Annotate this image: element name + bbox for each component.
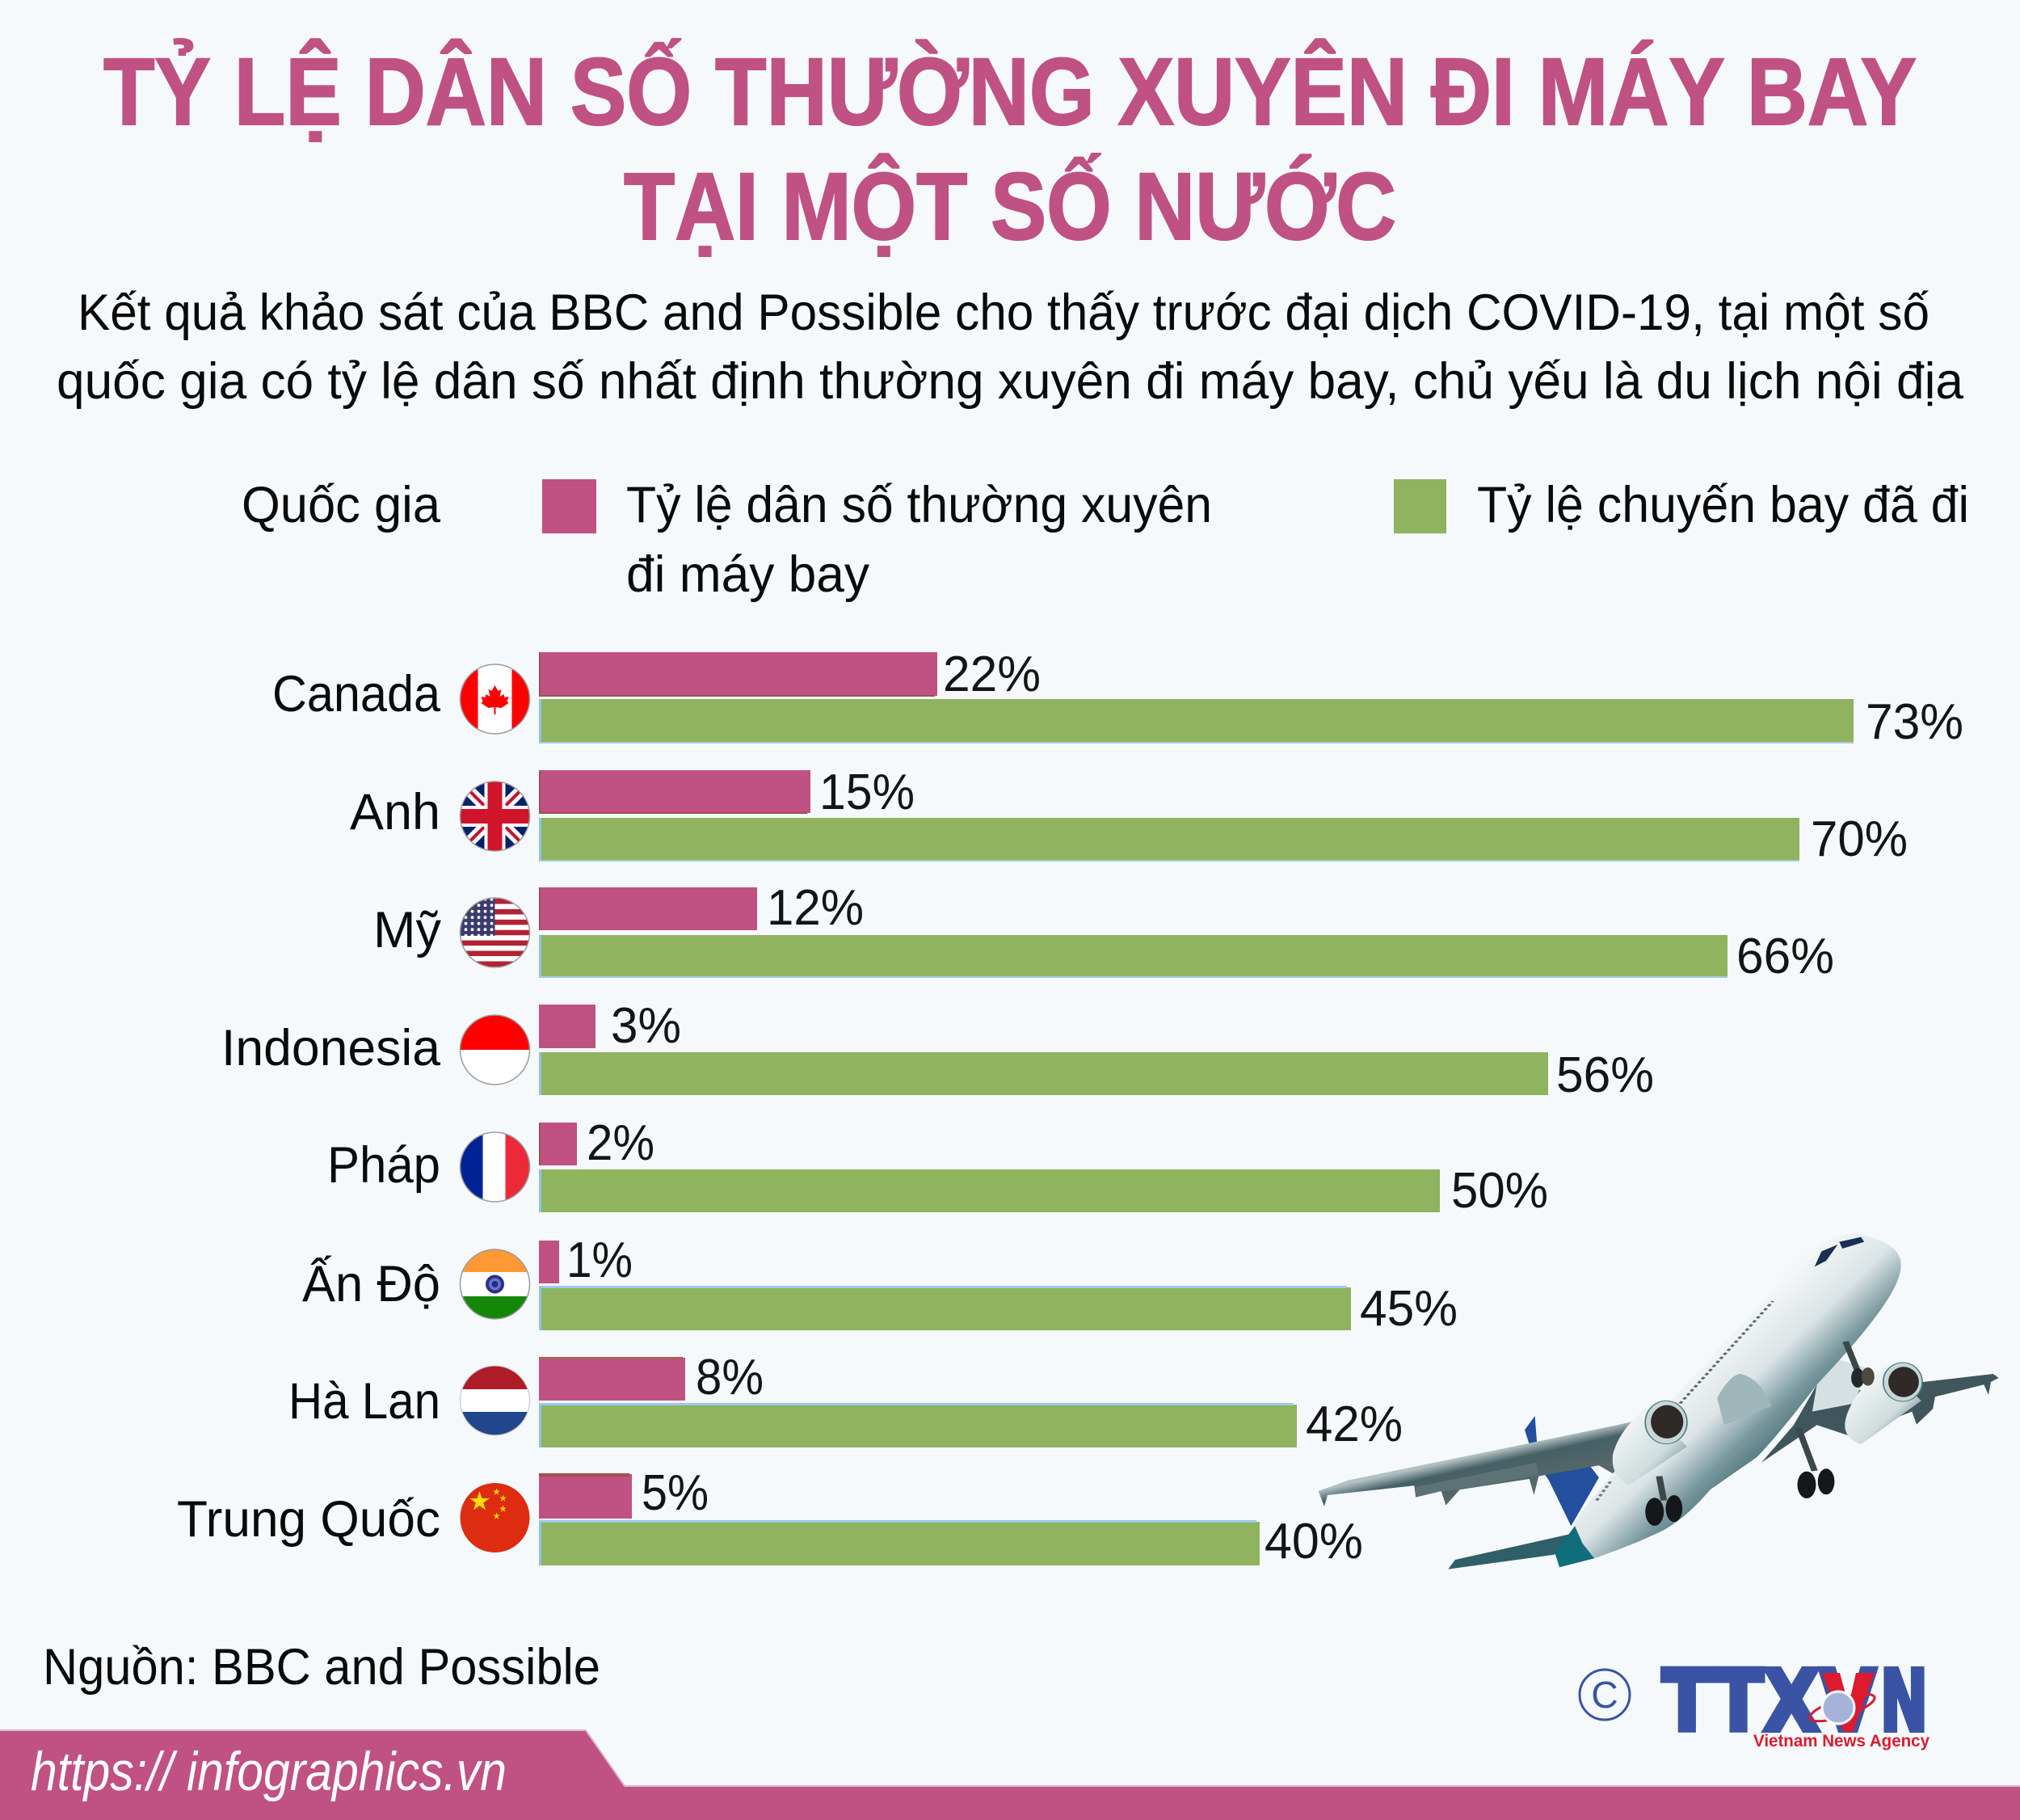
footer band: https:// infographics.vn [31,1741,507,1802]
legend: Tỷ lệ chuyến bay đã đi [1477,477,1969,533]
row: Ấn Độ [302,1241,1456,1330]
row: Trung Quốc: Trung Quốc [177,1491,440,1548]
row: Pháp: 2% [587,1115,654,1171]
logo: TTXVN: Vietnam News Agency [1753,1732,1930,1750]
row: Hà Lan: 42% [1306,1397,1403,1452]
airplane illustration [1319,1233,1999,1569]
title: TẠI MỘT SỐ NƯỚC [624,153,1396,260]
row: Indonesia: 56% [1556,1047,1654,1103]
row: Anh: 70% [1811,811,1908,867]
row: Mỹ: 66% [1736,929,1834,984]
legend: Quốc gia [242,477,441,533]
row: Indonesia [226,1005,1652,1095]
row: Mỹ: Mỹ [373,902,441,958]
row: Hà Lan [292,1357,1401,1447]
row: Ấn Độ: 45% [1360,1281,1458,1337]
logo: TTXVN: C [1591,1674,1618,1716]
row: Trung Quốc: 40% [1265,1514,1363,1569]
row: Trung Quốc: 5% [642,1465,709,1521]
logo: TTXVN [1580,1652,1930,1750]
row: Ấn Độ: Ấn Độ [302,1255,440,1312]
logo: TTXVN: N [1880,1652,1928,1750]
row: Anh: Anh [350,784,440,840]
row: Indonesia: Indonesia [221,1020,441,1076]
row: Hà Lan: Hà Lan [288,1373,440,1430]
subtitle text block: quốc gia có tỷ lệ dân số nhất định thường xuyên đi máy bay, chủ yếu là du lịch nội địa [57,353,1964,410]
logo: TTXVN: TTX [1662,1652,1820,1750]
row: Anh [350,770,1906,862]
row: Indonesia: 3% [611,998,681,1054]
row: Mỹ: 12% [767,880,864,936]
row: Canada: 22% [943,647,1041,702]
source note: Nguồn: BBC and Possible [43,1639,600,1696]
row: Canada [275,652,1962,744]
legend: Tỷ lệ dân số thường xuyên [626,477,1212,533]
row: Hà Lan: 8% [696,1350,764,1405]
row: Ấn Độ: 1% [566,1232,633,1288]
title [103,38,1917,260]
row: Pháp [331,1123,1547,1212]
legend [242,477,1969,603]
subtitle text block [57,284,1964,410]
footer band [0,1730,2020,1820]
row: Mỹ [377,887,1833,978]
row: Canada: 73% [1866,694,1963,750]
row: Pháp: Pháp [327,1137,440,1194]
legend: đi máy bay [626,546,869,603]
row: Anh: 15% [819,765,915,820]
logo: TTXVN: V [1820,1652,1876,1750]
row: Pháp: 50% [1451,1163,1548,1219]
row: Canada: Canada [272,666,441,723]
row: Trung Quốc [178,1473,1361,1565]
subtitle text block: Kết quả khảo sát của BBC and Possible cho thấy trước đại dịch COVID-19, tại một số [78,284,1930,341]
